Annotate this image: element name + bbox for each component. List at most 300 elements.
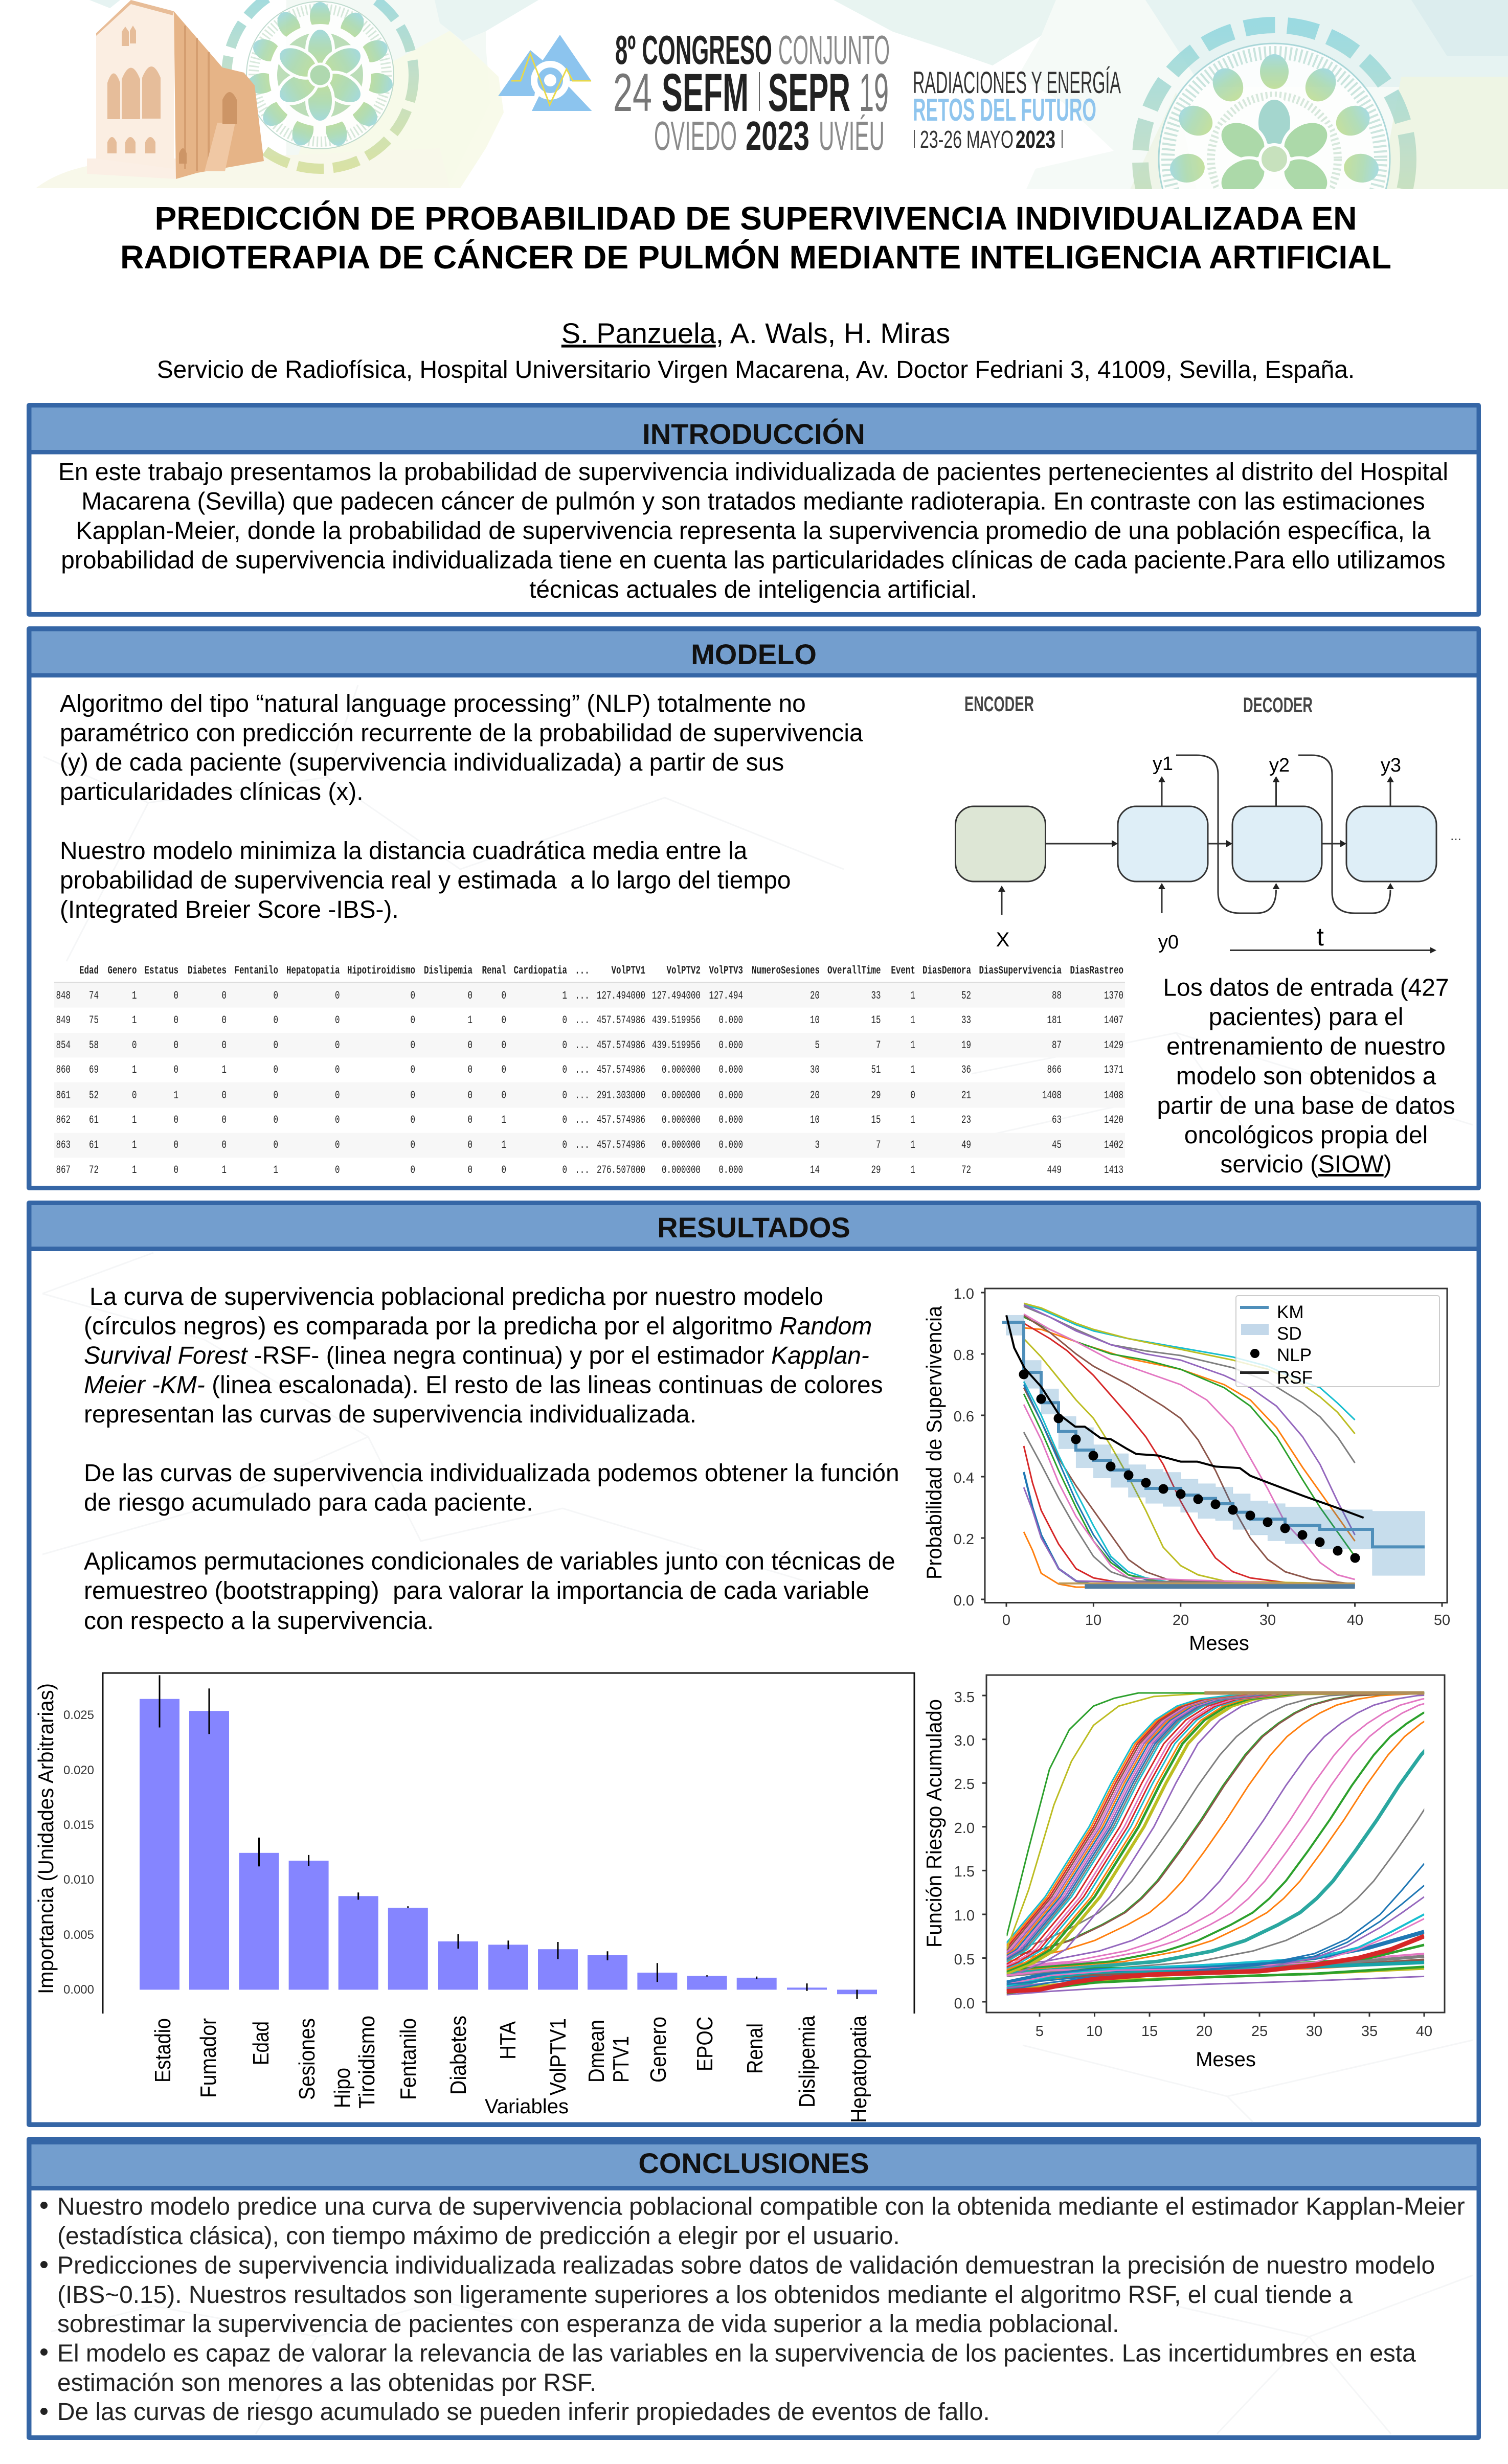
- conclusion bullet list: El modelo es capaz de valorar la relevancia de las variables en la supervivencia de los pacientes. Las incertidumbres en esta: [57, 2340, 1416, 2367]
- table: patient data: 0.000: [718, 1114, 743, 1126]
- table: patient data: 88: [1052, 989, 1062, 1002]
- text block: resultados: [84, 1283, 899, 1635]
- bars: [140, 1699, 877, 1994]
- text block: introducción: En este trabajo presentamos la probabilidad de supervivencia individualizada de pacientes pertenecientes al distrito del Hospital: [58, 459, 1448, 486]
- logo: SEFM SEPR trefoil: [498, 35, 592, 111]
- table: patient data: 0: [335, 1039, 340, 1052]
- table: patient data: 0: [562, 1164, 567, 1177]
- table: patient data: 0: [132, 1089, 137, 1102]
- axes and ticks: 10: [1085, 1612, 1101, 1629]
- table: patient data: 439.519956: [652, 1039, 701, 1052]
- text block: datos de entrada: Los datos de entrada (427: [1163, 975, 1449, 1002]
- table: patient data: 69: [89, 1064, 99, 1076]
- table: patient data: 127.494000: [652, 989, 701, 1002]
- panel: resultados: [27, 1201, 1508, 2127]
- table: patient data: VolPTV2: [667, 964, 701, 977]
- table: patient data: 72: [961, 1164, 971, 1177]
- axes and ticks: 20: [1173, 1612, 1189, 1629]
- table: patient data: 0: [501, 989, 506, 1002]
- table: patient data: [54, 964, 1125, 1177]
- error bars: [160, 1675, 857, 1999]
- table: patient data: 1: [222, 1164, 227, 1177]
- table: patient data: 0: [274, 1089, 278, 1102]
- table: patient data: Dislipemia: [424, 964, 472, 977]
- diagram: encoder decoder: y2: [1269, 755, 1290, 776]
- congress name: 8º CONGRESO: [615, 27, 772, 73]
- table: patient data: 0: [562, 1089, 567, 1102]
- banner: congress header: CONJUNTO: [778, 27, 890, 73]
- table: patient data: 75: [89, 1014, 99, 1027]
- variable labels: Fumador: [196, 2018, 221, 2098]
- diagram: encoder decoder: y0: [1158, 932, 1179, 953]
- congress slogan: RADIACIONES Y ENERGÍA: [913, 65, 1121, 100]
- table: patient data: 1370: [1104, 989, 1123, 1002]
- variable labels: Estadio: [150, 2018, 175, 2083]
- table: patient data: 0.000000: [662, 1114, 701, 1126]
- RSF line: [1006, 1315, 1364, 1518]
- table: patient data: 15: [871, 1114, 881, 1126]
- text block: introducción: [58, 459, 1448, 603]
- table: patient data: ...: [575, 1064, 590, 1076]
- table: patient data: 0: [132, 1039, 137, 1052]
- variable labels: Hipo: [330, 2068, 355, 2108]
- text block: datos de entrada: pacientes) para el: [1209, 1004, 1403, 1031]
- y axis label: Probabilidad de Supervivencia: [922, 1305, 946, 1579]
- y ticks: 0.020: [63, 1764, 94, 1777]
- axes and ticks: 0.8: [954, 1347, 974, 1364]
- axes and ticks: 0.4: [954, 1470, 974, 1486]
- table: patient data: 1413: [1104, 1164, 1123, 1177]
- text block: resultados: con respecto a la supervivencia.: [84, 1608, 434, 1635]
- heading: resultados: [32, 1205, 1477, 1247]
- text block: resultados: remuestreo (bootstrapping) para valorar la importancia de cada variable: [84, 1577, 869, 1604]
- axes and ticks: 30: [1306, 2023, 1322, 2040]
- table: patient data: 52: [961, 989, 971, 1002]
- axes and ticks: 5: [1036, 2023, 1044, 2040]
- variable labels: Hepatopatia: [846, 2016, 871, 2123]
- table: patient data: 0: [562, 1064, 567, 1076]
- table: patient data: 0: [335, 1114, 340, 1126]
- heading: modelo: [32, 631, 1477, 673]
- y axis label: Función Riesgo Acumulado: [922, 1699, 946, 1948]
- axes and ticks: 3.0: [954, 1733, 975, 1749]
- table: patient data: 1: [562, 989, 567, 1002]
- table: patient data: 0: [222, 1139, 227, 1151]
- table: patient data: 0: [467, 1039, 472, 1052]
- table: patient data: 0.000: [718, 1089, 743, 1102]
- legend: RSF: [1277, 1368, 1313, 1388]
- variable labels: [150, 2016, 871, 2123]
- table: patient data: 0: [562, 1114, 567, 1126]
- conclusion bullet list: De las curvas de riesgo acumulado se pueden inferir propiedades de eventos de fallo.: [57, 2399, 990, 2426]
- table: patient data: 0.000: [718, 1139, 743, 1151]
- table: patient data: 863: [56, 1139, 71, 1151]
- table: patient data: 10: [810, 1114, 820, 1126]
- text block: datos de entrada: servicio (SIOW): [1220, 1151, 1392, 1178]
- table: patient data: 849: [56, 1014, 71, 1027]
- variable labels: Dislipemia: [795, 2016, 820, 2108]
- Kaplan-Meier step curve: [1002, 1322, 1425, 1547]
- variable labels: Dmean: [584, 2020, 609, 2083]
- table: patient data: 0: [467, 1064, 472, 1076]
- table: patient data: NumeroSesiones: [752, 964, 820, 977]
- heading: modelo: MODELO: [691, 638, 817, 670]
- table: patient data: 0.000: [718, 1064, 743, 1076]
- axes and ticks: 50: [1434, 1612, 1450, 1629]
- axes and ticks: 25: [1251, 2023, 1268, 2040]
- left background wash: [36, 0, 538, 188]
- table: patient data: 1: [910, 1014, 915, 1027]
- congress slogan: RETOS DEL FUTURO: [913, 93, 1096, 128]
- title: PREDICCIÓN DE PROBABILIDAD DE SUPERVIVENCIA INDIVIDUALIZADA EN: [154, 200, 1357, 237]
- congress name: 24: [613, 63, 652, 123]
- table: patient data: 1: [910, 1039, 915, 1052]
- text block: resultados: La curva de supervivencia poblacional predicha por nuestro modelo: [89, 1283, 823, 1310]
- table: patient data: Event: [891, 964, 915, 977]
- variable labels: EPOC: [692, 2017, 717, 2071]
- table: patient data: 457.574986: [597, 1014, 645, 1027]
- variable labels: Renal: [742, 2023, 768, 2074]
- axes and ticks: 0.6: [954, 1409, 974, 1425]
- table: patient data: 0: [173, 1164, 178, 1177]
- table: patient data: 0: [501, 1064, 506, 1076]
- table: patient data: 848: [56, 989, 71, 1002]
- table: patient data: 63: [1052, 1114, 1062, 1126]
- individual survival curves: [1024, 1303, 1355, 1587]
- table: patient data: 0: [335, 1164, 340, 1177]
- table: patient data: 1: [910, 1164, 915, 1177]
- text block: resultados: Meier -KM- (linea escalonada). El resto de las lineas continuas de colores: [84, 1371, 883, 1399]
- table: patient data: 20: [810, 1089, 820, 1102]
- chart: survival curves: [922, 1286, 1450, 1655]
- table: patient data: 1408: [1042, 1089, 1062, 1102]
- y ticks: 0.000: [63, 1983, 94, 1997]
- panel: modelo: [27, 626, 1481, 1190]
- table: patient data: 0.000000: [662, 1064, 701, 1076]
- table: patient data: 0: [222, 1114, 227, 1126]
- table: patient data: 0: [411, 1014, 415, 1027]
- table: patient data: 0.000000: [662, 1089, 701, 1102]
- table: patient data: 0: [173, 1114, 178, 1126]
- table: patient data: 0: [411, 1064, 415, 1076]
- banner: congress header: [36, 0, 1508, 189]
- table: patient data: 0: [411, 1164, 415, 1177]
- axes and ticks: 1.5: [954, 1864, 975, 1880]
- table: patient data: 1420: [1104, 1114, 1123, 1126]
- table: patient data: Genero: [107, 964, 137, 977]
- table: patient data: 0: [562, 1139, 567, 1151]
- table: patient data: 457.574986: [597, 1039, 645, 1052]
- table: patient data: 0: [501, 1164, 506, 1177]
- diagram: encoder decoder: [955, 692, 1461, 953]
- table: patient data: Diabetes: [188, 964, 227, 977]
- table: patient data: 1: [910, 989, 915, 1002]
- table: patient data: 0: [173, 1139, 178, 1151]
- table: patient data: ...: [575, 964, 590, 977]
- variable labels: Edad: [249, 2021, 274, 2065]
- table: patient data: ...: [575, 1139, 590, 1151]
- table: patient data: 1: [910, 1114, 915, 1126]
- text block: resultados: Survival Forest -RSF- (linea negra continua) y por el estimador Kapplan-: [84, 1342, 869, 1369]
- congress slogan: [913, 65, 1121, 153]
- table: patient data: 0.000000: [662, 1139, 701, 1151]
- heading: resultados: RESULTADOS: [657, 1211, 850, 1244]
- table: patient data: 1: [132, 1064, 137, 1076]
- table: patient data: 449: [1047, 1164, 1062, 1177]
- table: patient data: 0.000: [718, 1164, 743, 1177]
- table: patient data: DiasSupervivencia: [979, 964, 1062, 977]
- rosette: right: [1132, 17, 1416, 189]
- table: patient data: 74: [89, 989, 99, 1002]
- x axis label: Meses: [1196, 2048, 1256, 2071]
- table: patient data: 0: [222, 1039, 227, 1052]
- congress name: OVIEDO: [654, 113, 737, 159]
- congress slogan: 23-26 MAYO: [920, 126, 1014, 153]
- table: patient data: 0: [173, 1039, 178, 1052]
- axes and ticks: 1.0: [954, 1908, 975, 1924]
- table: patient data: 7: [876, 1039, 881, 1052]
- table: patient data: 457.574986: [597, 1139, 645, 1151]
- panel: introducción: [27, 403, 1481, 617]
- diagram: encoder decoder: X: [996, 929, 1009, 951]
- table: patient data: 52: [89, 1089, 99, 1102]
- table: patient data: Estatus: [144, 964, 178, 977]
- table: patient data: 1: [132, 1139, 137, 1151]
- text block: descripción del algoritmo: (Integrated Breier Score -IBS-).: [60, 896, 399, 923]
- table: patient data: 72: [89, 1164, 99, 1177]
- table: patient data: 10: [810, 1014, 820, 1027]
- variable labels: VolPTV1: [546, 2018, 571, 2095]
- table: patient data: 1: [501, 1114, 506, 1126]
- table: patient data: 20: [810, 989, 820, 1002]
- text block: descripción del algoritmo: Algoritmo del tipo “natural language processing” (NLP) totalmente no: [60, 690, 806, 717]
- table: patient data: 1: [132, 1114, 137, 1126]
- text block: introducción: probabilidad de supervivencia individualizada tiene en cuenta las particularidades clínicas de cada paciente.Para ello utilizamos: [61, 547, 1446, 574]
- axes and ticks: 0.0: [954, 1593, 974, 1609]
- table: patient data: 0: [562, 1014, 567, 1027]
- text block: resultados: Aplicamos permutaciones condicionales de variables junto con técnicas de: [84, 1548, 895, 1575]
- table: patient data: 0.000000: [662, 1164, 701, 1177]
- table: patient data: 58: [89, 1039, 99, 1052]
- table: patient data: 23: [961, 1114, 971, 1126]
- table: patient data: 1: [132, 989, 137, 1002]
- table: patient data: 1371: [1104, 1064, 1123, 1076]
- table: patient data: ...: [575, 1039, 590, 1052]
- congress name: SEPR: [768, 63, 850, 123]
- axes and ticks: 0.0: [954, 1996, 975, 2012]
- table: patient data: 457.574986: [597, 1064, 645, 1076]
- table: patient data: 291.303000: [597, 1089, 645, 1102]
- axes and ticks: 40: [1347, 1612, 1363, 1629]
- table: patient data: Renal: [482, 964, 506, 977]
- title: [120, 200, 1391, 276]
- conclusion bullet list: Predicciones de supervivencia individualizada realizadas sobre datos de validación demuestran la precisión de nuestro modelo: [57, 2252, 1435, 2279]
- table: patient data: 1: [910, 1064, 915, 1076]
- table: patient data: 0: [467, 1114, 472, 1126]
- table: patient data: 0: [222, 1014, 227, 1027]
- table: patient data: 0: [910, 1089, 915, 1102]
- table: patient data: 457.574986: [597, 1114, 645, 1126]
- table: patient data: ...: [575, 1014, 590, 1027]
- table: patient data: 29: [871, 1164, 881, 1177]
- table: patient data: 0: [411, 989, 415, 1002]
- text block: datos de entrada: modelo son obtenidos a: [1176, 1063, 1436, 1090]
- table: patient data: 0: [335, 1014, 340, 1027]
- diagram: encoder decoder: DECODER: [1243, 693, 1313, 717]
- heading: introducción: INTRODUCCIÓN: [642, 418, 865, 450]
- chart: variable importance: [34, 1673, 914, 2123]
- illustration: church: [87, 0, 264, 179]
- text block: datos de entrada: partir de una base de datos: [1157, 1092, 1455, 1120]
- axes and ticks: 2.0: [954, 1820, 975, 1837]
- axes and ticks: 30: [1259, 1612, 1276, 1629]
- table: patient data: 854: [56, 1039, 71, 1052]
- text block: resultados: representan las curvas de supervivencia individualizada.: [84, 1401, 696, 1428]
- table: patient data: 0: [467, 989, 472, 1002]
- table: patient data: 0: [467, 1089, 472, 1102]
- conclusion bullet list: [40, 2194, 1465, 2426]
- axes and ticks: 15: [1141, 2023, 1158, 2040]
- table: patient data: 30: [810, 1064, 820, 1076]
- variable labels: PTV1: [609, 2036, 634, 2083]
- table: patient data: 15: [871, 1014, 881, 1027]
- axes and ticks: 2.5: [954, 1776, 975, 1793]
- table: patient data: 36: [961, 1064, 971, 1076]
- table: patient data: 1402: [1104, 1139, 1123, 1151]
- text block: resultados: De las curvas de supervivencia individualizada podemos obtener la función: [84, 1460, 899, 1487]
- table: patient data: ...: [575, 1164, 590, 1177]
- table: patient data: 0: [222, 989, 227, 1002]
- legend: [1236, 1296, 1439, 1388]
- table: patient data: 1: [501, 1139, 506, 1151]
- table: patient data: Hepatopatia: [286, 964, 340, 977]
- table: patient data: 0: [173, 1064, 178, 1076]
- axes and ticks: 40: [1416, 2023, 1432, 2040]
- variable labels: Sesiones: [295, 2018, 320, 2100]
- variable labels: Tiroidismo: [354, 2016, 379, 2109]
- text block: descripción del algoritmo: particularidades clínicas (x).: [60, 778, 364, 806]
- table: patient data: 7: [876, 1139, 881, 1151]
- table: patient data: 0: [411, 1114, 415, 1126]
- table: patient data: 127.494: [709, 989, 743, 1002]
- axes and ticks: 35: [1361, 2023, 1378, 2040]
- table: patient data: 0: [501, 1089, 506, 1102]
- table: patient data: 87: [1052, 1039, 1062, 1052]
- text block: datos de entrada: entrenamiento de nuestro: [1166, 1033, 1446, 1060]
- table: patient data: 0: [274, 1039, 278, 1052]
- table: patient data: 0: [274, 1014, 278, 1027]
- table: patient data: 0: [335, 1064, 340, 1076]
- text block: descripción del algoritmo: paramétrico con predicción recurrente de la probabilidad de supervivencia: [60, 720, 863, 747]
- axes and ticks: 1.0: [954, 1286, 974, 1302]
- table: patient data: 51: [871, 1064, 881, 1076]
- diagram: encoder decoder: ENCODER: [964, 692, 1034, 716]
- table: patient data: 1: [910, 1139, 915, 1151]
- table: patient data: 0: [335, 1139, 340, 1151]
- table: patient data: 1: [173, 1089, 178, 1102]
- conclusion bullet list: estimación son menores a las obtenidas por RSF.: [57, 2369, 596, 2397]
- table: patient data: VolPTV1: [612, 964, 645, 977]
- congress name: SEFM: [662, 63, 749, 123]
- text block: resultados: de riesgo acumulado para cada paciente.: [84, 1489, 533, 1517]
- table: patient data: ...: [575, 1089, 590, 1102]
- table: patient data: 0: [274, 989, 278, 1002]
- chart: cumulative risk curves: [926, 1674, 1445, 2067]
- axes and ticks: 20: [1196, 2023, 1212, 2040]
- text block: datos de entrada: [1157, 975, 1455, 1178]
- heading: introducción: [32, 408, 1477, 450]
- individual risk curves: [1006, 1691, 1425, 1996]
- table: patient data: 1: [274, 1164, 278, 1177]
- variable labels: Fentanilo: [396, 2018, 421, 2100]
- diagram: encoder decoder: ...: [1450, 828, 1461, 843]
- diagram: encoder decoder: t: [1317, 922, 1324, 951]
- y ticks: 0.025: [63, 1708, 94, 1722]
- table: patient data: 5: [815, 1039, 820, 1052]
- table: patient data: VolPTV3: [709, 964, 743, 977]
- congress name: UVIÉU: [819, 113, 885, 159]
- table: patient data: 0.000: [718, 1014, 743, 1027]
- table: patient data: OverallTime: [827, 964, 881, 977]
- table: patient data: Cardiopatia: [514, 964, 567, 977]
- table: patient data: 0: [467, 1164, 472, 1177]
- table: patient data: 0: [222, 1089, 227, 1102]
- table: patient data: 862: [56, 1114, 71, 1126]
- text block: resultados: (círculos negros) es comparada por la predicha por el algoritmo Random: [84, 1313, 872, 1340]
- table: patient data: DiasDemora: [922, 964, 971, 977]
- table: patient data: 0: [173, 989, 178, 1002]
- x axis label: Meses: [1189, 1632, 1249, 1655]
- y ticks: [63, 1708, 94, 1997]
- table: patient data: 860: [56, 1064, 71, 1076]
- variable labels: Genero: [646, 2017, 671, 2083]
- table: patient data: 0: [274, 1139, 278, 1151]
- axes and ticks: [954, 1286, 1450, 1629]
- variable labels: HTA: [496, 2021, 521, 2060]
- table: patient data: Hipotiroidismo: [347, 964, 415, 977]
- variable labels: Diabetes: [446, 2016, 471, 2095]
- table: patient data: 0: [274, 1064, 278, 1076]
- table: patient data: 33: [961, 1014, 971, 1027]
- table: patient data: 49: [961, 1139, 971, 1151]
- table: patient data: 0: [335, 989, 340, 1002]
- table: patient data: 127.494000: [597, 989, 645, 1002]
- text block: descripción del algoritmo: probabilidad de supervivencia real y estimada a lo largo del tiempo: [60, 867, 791, 894]
- axes and ticks: 10: [1086, 2023, 1102, 2040]
- table: patient data: 0: [274, 1114, 278, 1126]
- table: patient data: ...: [575, 1114, 590, 1126]
- NLP dots: [1019, 1369, 1360, 1563]
- table: patient data: ...: [575, 989, 590, 1002]
- legend: NLP: [1277, 1345, 1312, 1365]
- table: patient data: 19: [961, 1039, 971, 1052]
- axes and ticks: 0.5: [954, 1952, 975, 1968]
- axes and ticks: 3.5: [954, 1689, 975, 1706]
- table: patient data: 3: [815, 1139, 820, 1151]
- table: patient data: 1408: [1104, 1089, 1123, 1102]
- panel: conclusiones: [27, 2137, 1481, 2440]
- table: patient data: 0: [335, 1089, 340, 1102]
- legend: KM: [1277, 1302, 1304, 1322]
- table: patient data: 0: [562, 1039, 567, 1052]
- conclusion bullet list: Nuestro modelo predice una curva de supervivencia poblacional compatible con la obtenida mediante el estimador Kapplan-Meier: [57, 2194, 1465, 2220]
- table: patient data: 0: [467, 1139, 472, 1151]
- table: patient data: 61: [89, 1139, 99, 1151]
- table: patient data: 276.507000: [597, 1164, 645, 1177]
- text block: descripción del algoritmo: [60, 690, 863, 923]
- heading: conclusiones: [32, 2144, 1477, 2186]
- y axis label: Importancia (Unidades Arbitrarias): [34, 1683, 58, 1994]
